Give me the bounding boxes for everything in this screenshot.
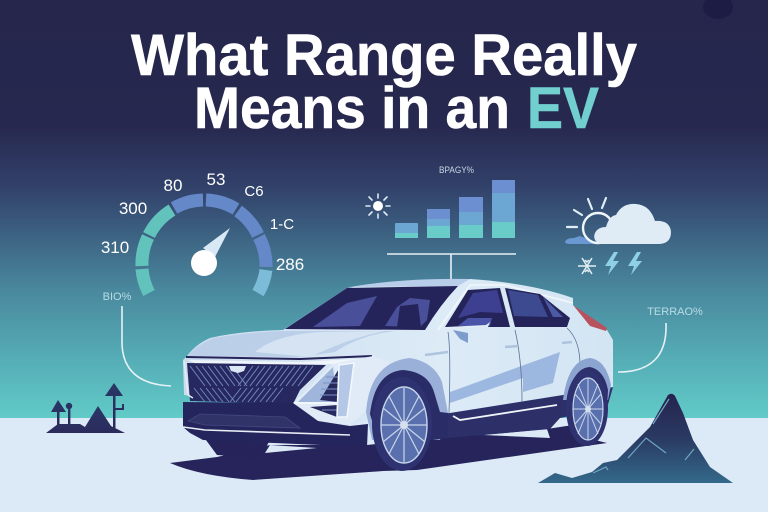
gauge numbers: C6	[244, 183, 264, 200]
front grille	[187, 363, 326, 404]
bar chart	[387, 165, 516, 279]
car ground shadow	[170, 429, 607, 480]
front wheel	[372, 377, 432, 471]
side mirror	[440, 322, 490, 329]
grille emblem	[229, 366, 246, 373]
seats in windshield	[385, 298, 430, 327]
gauge arc segments	[142, 200, 266, 293]
door lines and handles	[448, 328, 580, 413]
label: TERRAO% with connector	[618, 306, 703, 372]
ground wedges under car	[265, 429, 550, 453]
gauge numbers: 310	[101, 238, 129, 257]
chart baseline and stem	[387, 254, 516, 279]
roof highlight	[350, 279, 470, 287]
title: What Range Really	[131, 23, 637, 88]
icon: trees and hill	[46, 383, 125, 433]
chart label: BPAGY%	[439, 165, 474, 175]
side rear windows	[505, 288, 570, 327]
bar 1	[395, 223, 418, 238]
gauge numbers: 286	[276, 255, 304, 274]
car hood shading	[188, 331, 395, 357]
tail light	[573, 305, 607, 331]
door shading	[450, 352, 560, 403]
gauge numbers: 80	[164, 176, 182, 195]
bar 2	[427, 209, 450, 238]
lower chrome strip	[183, 427, 350, 435]
title	[131, 23, 637, 141]
gauge numbers: 53	[207, 170, 225, 189]
gauge hub	[191, 250, 217, 276]
gauge numbers	[101, 170, 304, 274]
speedometer gauge	[101, 170, 304, 293]
label: BIO% with connector: BIO%	[103, 291, 132, 303]
icon: mountain	[538, 394, 733, 483]
bar 3	[459, 197, 483, 238]
title: Means in an	[194, 76, 510, 141]
hood edge and headlight bar	[186, 356, 372, 359]
ground	[0, 418, 768, 512]
rear tire back	[547, 425, 573, 440]
icon: small sun	[366, 194, 390, 218]
grille side chrome	[184, 361, 196, 410]
rear wheel	[566, 370, 608, 446]
rear wheel arch	[563, 358, 611, 400]
roof chrome strip	[438, 285, 573, 330]
gauge needle	[203, 228, 230, 257]
side sill chrome	[453, 405, 557, 420]
windshield reflection	[313, 296, 377, 327]
label: BIO% with connector	[103, 291, 171, 386]
gauge numbers: 1-C	[270, 216, 294, 233]
lower air intake	[188, 414, 300, 428]
headlight assembly	[293, 356, 390, 425]
bar 4	[492, 180, 515, 238]
front wheel arch	[366, 358, 448, 440]
label: TERRAO% with connector: TERRAO%	[647, 306, 703, 318]
lower bumper	[183, 402, 368, 447]
windshield	[285, 286, 458, 330]
gauge numbers: 300	[119, 199, 147, 218]
side front window	[445, 288, 510, 327]
car lower body	[420, 385, 613, 440]
title: EV	[527, 76, 599, 141]
grille chevron pattern	[190, 366, 313, 402]
car main body	[183, 279, 613, 425]
car	[170, 279, 613, 480]
dark smudge top right	[703, 0, 733, 19]
icon: weather cloud, sun, snow and lightning	[565, 198, 671, 275]
front tire left	[203, 436, 270, 458]
